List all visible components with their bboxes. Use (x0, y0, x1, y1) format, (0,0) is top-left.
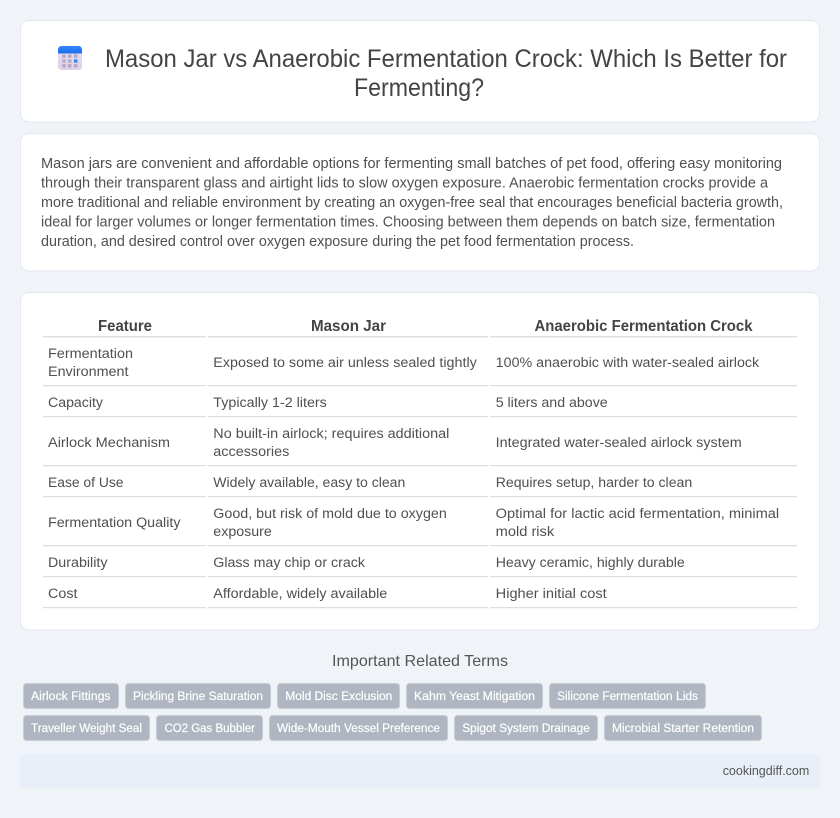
description text: duration, and desired control over oxygen exposure during the pet food fermentation process. (41, 234, 634, 250)
tag: kahm yeast mitigation (406, 684, 542, 708)
description text: more traditional and reliable environment by creating an oxygen-free seal that encourages beneficial bacteria growth, (41, 195, 783, 211)
tag: microbial starter retention: Microbial Starter Retention (612, 721, 754, 735)
row: capacity: Typically 1-2 liters (213, 395, 327, 411)
table header row: Anaerobic Fermentation Crock (534, 318, 753, 335)
title: Fermenting? (354, 74, 484, 102)
row: airlock mechanism: No built-in airlock; requires additional (213, 426, 449, 442)
row: fermentation quality (48, 506, 779, 540)
row: fermentation environment: Fermentation (48, 346, 133, 362)
table header row: Feature (98, 318, 152, 335)
icon: calendar (58, 46, 82, 70)
row: fermentation quality: Fermentation Quality (48, 515, 181, 531)
heading: important related terms: Important Related Terms (332, 653, 508, 670)
row: fermentation environment (48, 346, 760, 380)
row: cost: Higher initial cost (496, 586, 607, 602)
tag: kahm yeast mitigation: Kahm Yeast Mitigation (414, 689, 535, 703)
row: durability: Durability (48, 555, 108, 571)
description text: Mason jars are convenient and affordable options for fermenting small batches of pet food, offering easy monitoring (41, 156, 782, 172)
panel: description (20, 134, 820, 271)
tag: wide-mouth vessel preference (270, 716, 448, 740)
title: Mason Jar vs Anaerobic Fermentation Crock: Which Is Better for (105, 45, 787, 73)
row: cost (48, 586, 607, 602)
row: ease of use: Requires setup, harder to clean (496, 475, 692, 491)
row: fermentation quality: exposure (213, 524, 272, 540)
tag: airlock fittings: Airlock Fittings (31, 689, 110, 703)
tag: airlock fittings (24, 684, 118, 708)
row: fermentation quality: Good, but risk of mold due to oxygen (213, 506, 447, 522)
row: airlock mechanism: Integrated water-sealed airlock system (496, 435, 742, 451)
row: fermentation quality: mold risk (496, 524, 555, 540)
tag: traveller weight seal: Traveller Weight Seal (31, 721, 142, 735)
related term tags (24, 684, 762, 740)
footer: cookingdiff.com (723, 763, 809, 778)
footer (20, 754, 820, 788)
row: airlock mechanism (48, 426, 742, 460)
row: cost: Cost (48, 586, 78, 602)
tag: spigot system drainage (454, 716, 598, 740)
row: capacity: 5 liters and above (496, 395, 608, 411)
tag: pickling brine saturation: Pickling Brine Saturation (133, 689, 263, 703)
panel: header (20, 20, 820, 122)
row: capacity (48, 395, 608, 411)
tag: microbial starter retention (604, 716, 762, 740)
row: ease of use (48, 475, 692, 491)
row: durability: Heavy ceramic, highly durable (496, 555, 685, 571)
tag: traveller weight seal (24, 716, 150, 740)
row: durability: Glass may chip or crack (213, 555, 366, 571)
table header row: Mason Jar (311, 318, 386, 335)
table header row (98, 318, 753, 335)
title (105, 45, 787, 102)
row: durability (48, 555, 685, 571)
tag: co2 gas bubbler: CO2 Gas Bubbler (164, 721, 255, 735)
description text: through their transparent glass and airtight lids to slow oxygen exposure. Anaerobic fermentation crocks provide a (41, 176, 769, 192)
row: fermentation environment: Exposed to some air unless sealed tightly (213, 355, 478, 371)
tag: wide-mouth vessel preference: Wide-Mouth Vessel Preference (277, 721, 440, 735)
tag: silicone fermentation lids: Silicone Fermentation Lids (557, 689, 698, 703)
tag: co2 gas bubbler (156, 716, 262, 740)
tag: mold disc exclusion: Mold Disc Exclusion (285, 689, 392, 703)
row: airlock mechanism: accessories (213, 444, 289, 460)
row: fermentation environment: Environment (48, 364, 129, 380)
tag: spigot system drainage: Spigot System Drainage (462, 721, 590, 735)
row: ease of use: Widely available, easy to clean (213, 475, 405, 491)
tag: mold disc exclusion (278, 684, 400, 708)
row: ease of use: Ease of Use (48, 475, 124, 491)
row: airlock mechanism: Airlock Mechanism (48, 435, 170, 451)
row: fermentation environment: 100% anaerobic with water-sealed airlock (496, 355, 760, 371)
row: fermentation quality: Optimal for lactic acid fermentation, minimal (496, 506, 779, 522)
row: capacity: Capacity (48, 395, 104, 411)
panel: comparison table (20, 292, 820, 630)
description text: ideal for larger volumes or longer fermentation times. Choosing between them depends on batch size, fermentation (41, 214, 775, 230)
description text (41, 156, 783, 250)
row: cost: Affordable, widely available (213, 586, 387, 602)
tag: pickling brine saturation (126, 684, 270, 708)
tag: silicone fermentation lids (550, 684, 706, 708)
